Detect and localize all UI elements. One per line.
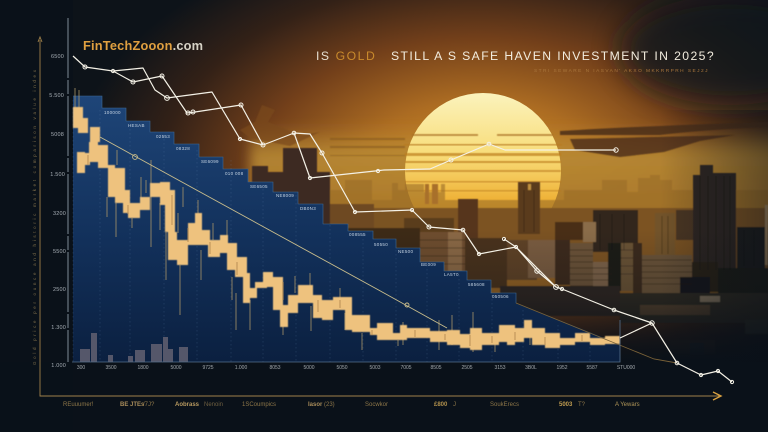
title continued: STILL A S SAFE HAVEN INVESTMENT IN 2025? [391,49,715,63]
step value labels: 100000 [104,110,121,115]
panel: stepped blue area chart [73,96,620,362]
trend line: tan diagonal [100,137,677,363]
step value labels: LA5T0 [444,272,459,277]
bottom category labels: £800 [434,402,448,408]
step value labels: 585608 [468,282,485,287]
x axis labels: 9725 [202,365,214,371]
bottom category labels: Socwkor [365,402,388,408]
axes [38,18,721,400]
candle shadow notches [88,155,582,346]
horizon haze [250,125,768,225]
bottom category labels: 5003 [559,402,573,408]
sun [404,93,562,249]
x axis labels: STU000 [617,365,635,371]
city skyline [252,148,768,355]
x axis labels: 7005 [400,365,412,371]
y axis labels: 6500 [51,54,64,60]
step value labels: BE009 [421,262,436,267]
step value labels: SE6099 [201,159,219,164]
bottom category labels: Aobrass [175,402,200,408]
y axis labels [49,54,66,369]
step value labels: SE6505 [250,184,268,189]
step value labels: HESAB [128,123,145,128]
bottom night ground [0,362,768,432]
step value labels: NE500 [398,249,413,254]
skyline: mid band [330,208,768,268]
x axis labels: 3153 [494,365,506,371]
x axis labels: 300 [77,365,85,371]
bottom category labels: T? [578,402,586,408]
x axis labels: 1.000 [235,365,247,371]
step value labels: 50550 [374,242,388,247]
y axis labels: 5008 [51,132,64,138]
bottom category labels: Iasor [308,402,323,408]
skyline: far haze buildings [330,175,768,300]
candlestick series [73,107,620,350]
x axis labels: 5000 [303,365,315,371]
y axis labels: 3200 [53,211,66,217]
skyline: near blocks [320,228,420,298]
title: IS GOLD [316,49,376,63]
white trend lines with markers [73,56,734,384]
subtitle: STRI SEWARE N IASVAN' AKXO MKKRRPRH SEJ2J [534,68,709,74]
bottom category labels: SoukErecs [490,402,519,408]
x axis: inner baseline [72,320,620,362]
bottom category labels: /7J? [143,402,155,408]
bottom category labels: Nenoin [204,402,223,408]
city shading [300,230,768,370]
step value labels: 010 008 [225,171,244,176]
step value labels: 008555 [349,232,366,237]
bottom category labels: J [453,402,456,408]
clouds across the horizon [240,105,768,157]
building floor lines [420,240,692,286]
bottom category labels: A Yewars [615,402,640,408]
bottom category labels: (23) [324,402,335,408]
bottom category labels [63,402,640,408]
x axis labels: 1952 [556,365,568,371]
skyline: tower group left [252,148,330,225]
bottom category labels: BE JTEs [120,402,145,408]
arrow: x axis head [713,392,721,400]
x axis labels: 2505 [461,365,473,371]
building vertical ribs [524,176,754,270]
y axis: dashed inner [67,18,69,362]
y axis labels: 1.300 [51,325,66,331]
x axis labels: 5050 [336,365,348,371]
step value labels: 08328 [176,146,190,151]
candlestick wicks [75,88,530,352]
y axis labels: 1.500 [50,172,65,178]
x axis labels: 8505 [430,365,442,371]
chart grid lines [73,100,590,362]
step value labels: DB0N3 [300,206,316,211]
outer gold axis [40,40,720,396]
x axis labels [77,365,635,371]
bottom category labels: 1SCoumpics [242,402,276,408]
x axis labels: 5003 [369,365,381,371]
y axis caption: Gold price per ounce and historic market comparison value index [32,69,37,365]
x axis labels: 5587 [586,365,598,371]
skyline: large dark tower [693,165,736,272]
x axis labels: 5000 [170,365,182,371]
step value labels: 02553 [156,134,170,139]
x axis labels: 8053 [269,365,281,371]
y axis labels: 1.000 [51,363,66,369]
step value labels: 050506 [492,294,509,299]
volume bars [80,333,188,362]
dark top right cloud mass [620,0,768,105]
left dark margin [0,0,73,432]
step value labels: NE8009 [276,193,294,198]
step value labels [104,110,509,299]
y axis labels: 5.500 [49,93,64,99]
x axis labels: 3B0L [525,365,537,371]
right edge shading [660,110,768,370]
arrow: y axis head [38,37,42,42]
logo: FinTechZooon.com: FinTechZooon.com [83,38,203,53]
x axis labels: 3500 [105,365,117,371]
x axis labels: 1800 [137,365,149,371]
y axis labels: 5500 [53,249,66,255]
y axis labels: 2500 [53,287,66,293]
bottom category labels: REuuumer! [63,402,94,408]
